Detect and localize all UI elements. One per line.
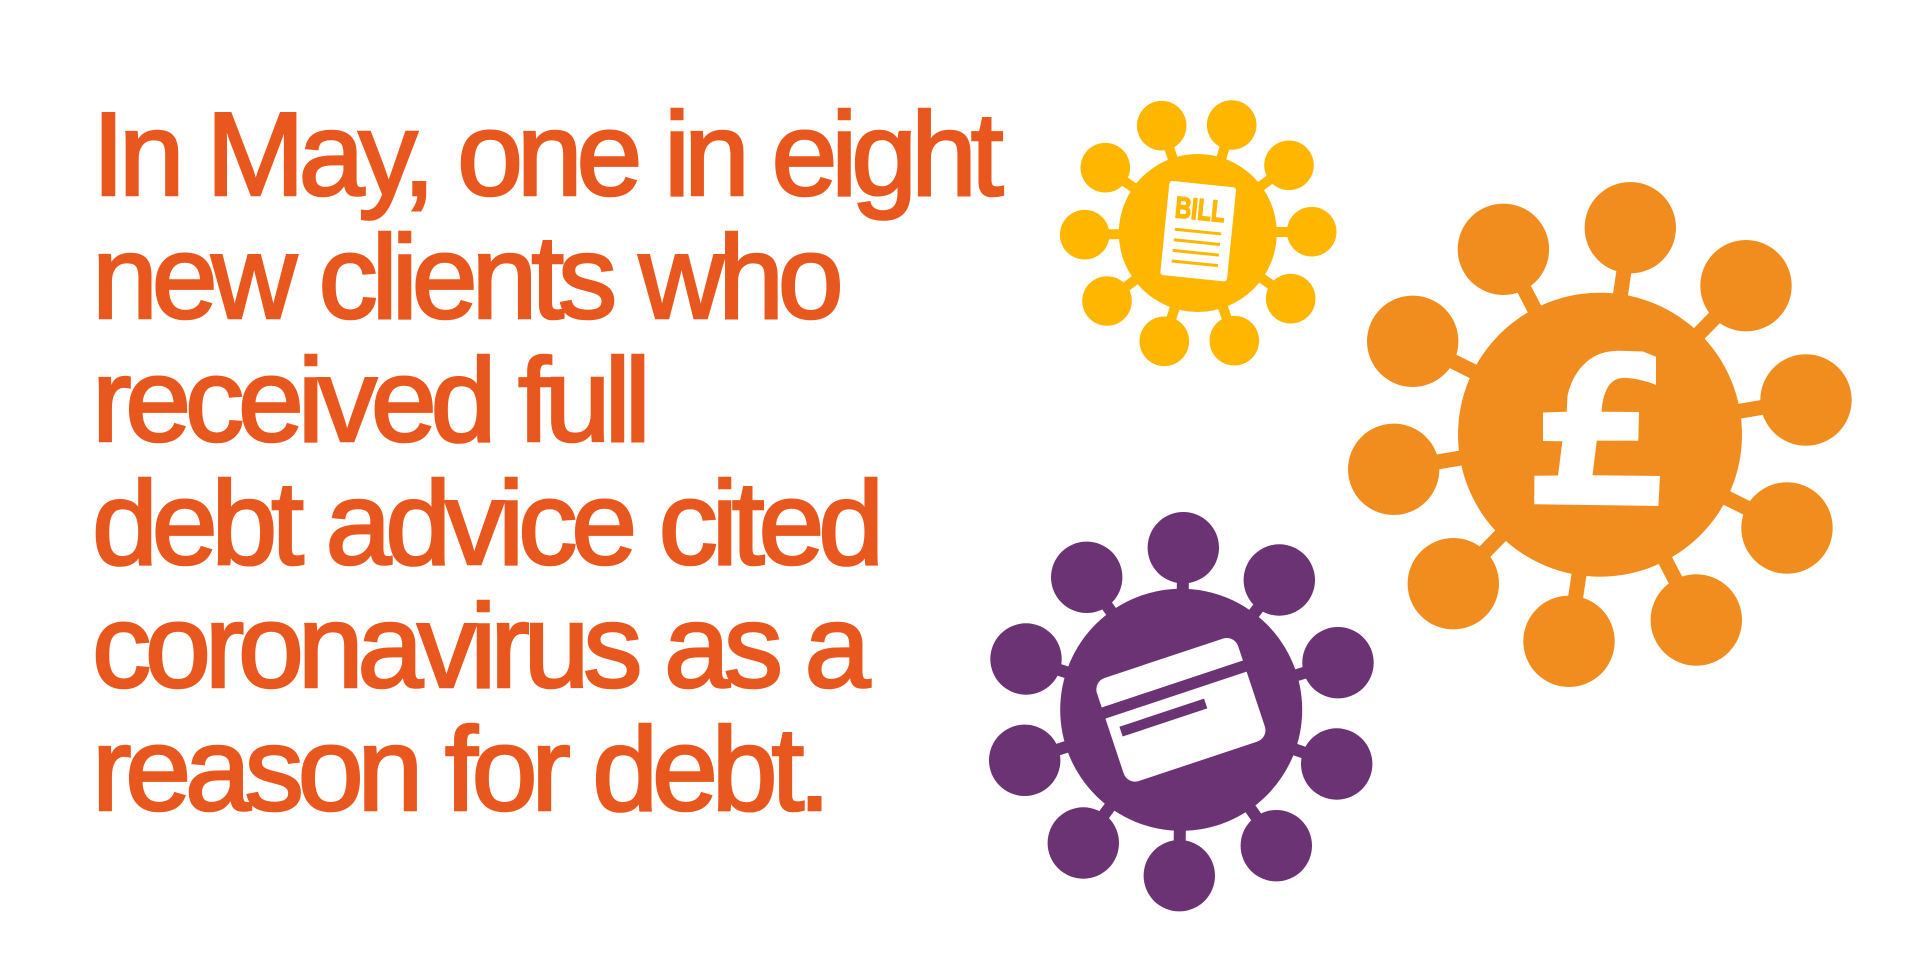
- headline text block: new clients who: [92, 212, 839, 344]
- icon: credit card: [1092, 634, 1270, 785]
- icon: pound sign: [1534, 351, 1660, 506]
- headline text block: debt advice cited: [92, 458, 878, 590]
- headline text block: reason for debt.: [92, 704, 825, 836]
- headline text block: [92, 89, 1004, 836]
- bill label: BILL: [1174, 190, 1227, 229]
- icon: purple virus with credit card: [989, 512, 1374, 911]
- icon: bill document: [1160, 181, 1236, 282]
- headline text block: coronavirus as a: [92, 581, 871, 713]
- icon: yellow virus with bill: [1060, 100, 1336, 366]
- headline text block: In May, one in eight: [92, 89, 1004, 221]
- headline text block: received full: [92, 335, 645, 467]
- icon: orange virus with pound sign: [1348, 182, 1852, 687]
